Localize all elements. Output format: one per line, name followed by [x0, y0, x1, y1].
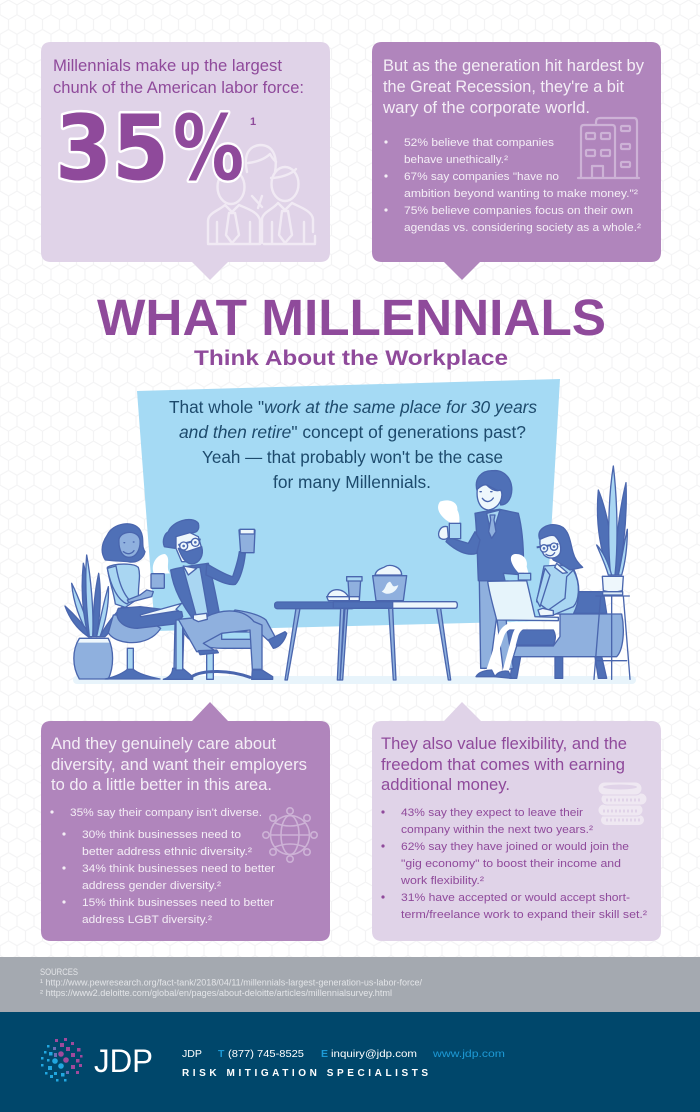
- chair: armchair and plant stand: [500, 592, 623, 678]
- big number: 35%: 35: [55, 96, 169, 201]
- sources text: SOURCES: [40, 967, 78, 977]
- heading: diversity: [51, 734, 307, 794]
- panel: largest chunk of labor force: [41, 42, 330, 280]
- logo: dot cluster: [41, 1038, 82, 1082]
- heading: great recession: But as the generation hit hardest by: [383, 56, 644, 75]
- heading: labor force: Millennials make up the largest: [53, 56, 282, 75]
- bullet list: corporate distrust: behave unethically.²: [404, 154, 508, 166]
- person: bearded man with coffee: [163, 520, 287, 679]
- heading: labor force: [53, 56, 304, 97]
- icon: business people: [208, 145, 315, 244]
- heading: great recession: the Great Recession, they're a bit: [383, 77, 624, 96]
- icon: right plant: [594, 466, 630, 679]
- icon: office building: [578, 118, 639, 178]
- bullet list: corporate distrust: agendas vs. considering society as a whole.²: [404, 222, 641, 234]
- icon: woman's mug with steam: [151, 554, 170, 588]
- icon: globe network: [263, 808, 317, 862]
- tagline: RISK MITIGATION SPECIALISTS: [182, 1068, 432, 1079]
- bullet list: flexibility stats: term/freelance work to expand their skill set.²: [401, 909, 647, 921]
- heading: flexibility: freedom that comes with earning: [381, 755, 625, 774]
- heading: diversity: to do a little better in this area.: [51, 775, 272, 794]
- table: right half with cup and bucket: [333, 565, 457, 680]
- contact line: inquiry@jdp.com: [331, 1048, 417, 1060]
- bullet list: corporate distrust: 67% say companies "have no: [404, 171, 559, 183]
- bullet list: flexibility stats: 62% say they have joined or would join the: [401, 841, 629, 853]
- bullet list: flexibility stats: 31% have accepted or would accept short-: [401, 892, 630, 904]
- sources text: [40, 967, 423, 998]
- floor: [73, 676, 636, 684]
- bullet list: diversity stats: 35% say their company isn't diverse.: [70, 807, 262, 819]
- callout: work at same place: Yeah — that probably won't be the case: [202, 447, 503, 467]
- sources text: ² https://www2.deloitte.com/global/en/pages/about-deloitte/articles/millennialsurvey.html: [40, 988, 392, 998]
- bullet list: flexibility stats: company within the next two years.²: [401, 824, 593, 836]
- bullet list: diversity stats: 30% think businesses need to: [82, 829, 241, 841]
- table: left half: [275, 590, 355, 680]
- callout: work at same place: and then retire" concept of generations past?: [179, 422, 526, 442]
- contact line: www.jdp.com: [432, 1048, 505, 1060]
- contact line: (877) 745-8525: [228, 1048, 304, 1060]
- heading: flexibility: additional money.: [381, 775, 510, 794]
- person: woman with notebook: [102, 524, 193, 679]
- contact line: T: [218, 1048, 225, 1060]
- heading: diversity: And they genuinely care about: [51, 734, 276, 753]
- bullet list: diversity stats: 34% think businesses need to better: [82, 863, 275, 875]
- icon: coin stack: [598, 782, 647, 825]
- heading: great recession: [382, 56, 644, 117]
- bullet list: flexibility stats: "gig economy" to boost their income and: [401, 858, 621, 870]
- heading: diversity: diversity, and want their employers: [51, 755, 307, 774]
- bullet list: flexibility stats: work flexibility.²: [400, 875, 484, 887]
- contact line: E: [321, 1048, 328, 1060]
- contact line: JDP: [182, 1048, 202, 1060]
- person: standing man with mug: [438, 471, 523, 671]
- bullet list: diversity stats: better address ethnic diversity.²: [82, 846, 252, 858]
- illustration: woman with notebook and plant, bearded man with coffee: [65, 520, 355, 680]
- footer band: [0, 1012, 700, 1112]
- subtitle: Think About the Workplace: [194, 347, 508, 370]
- big number: 35%: [55, 96, 244, 201]
- bullet list: diversity stats: address LGBT diversity.²: [82, 914, 212, 926]
- bullet list: corporate distrust: 75% believe companies focus on their own: [404, 205, 633, 217]
- sources text: ¹ http://www.pewresearch.org/fact-tank/2018/04/11/millennials-largest-generation-us-labor-force/: [40, 978, 423, 988]
- panel: diversity: [41, 702, 330, 941]
- bullet list: diversity stats: [50, 807, 275, 926]
- bullet list: corporate distrust: [384, 137, 641, 234]
- callout: work at same place: [169, 397, 537, 492]
- panel: blue backdrop: [137, 379, 560, 631]
- chair: woman's seat: [105, 615, 161, 679]
- footnote marker: 1: [250, 116, 256, 128]
- bullet list: diversity stats: 15% think businesses need to better: [82, 897, 274, 909]
- panel: flexibility: [372, 702, 661, 941]
- logo: JDP wordmark: JDP: [94, 1043, 153, 1079]
- title: WHAT MILLENNIALS: [97, 289, 606, 346]
- bullet list: corporate distrust: ambition beyond wanting to make money."²: [404, 188, 638, 200]
- heading: labor force: chunk of the American labor force:: [53, 78, 304, 97]
- callout: work at same place: for many Millennials.: [273, 472, 431, 492]
- icon: left plant: [65, 555, 125, 679]
- callout: work at same place: That whole "work at the same place for 30 years: [169, 397, 537, 417]
- big number: 35%: %: [173, 96, 244, 201]
- illustration: table items, standing man and seated woman, plant: [333, 466, 630, 680]
- panel: wary of the corporate world: [372, 42, 661, 280]
- bullet list: flexibility stats: 43% say they expect to leave their: [401, 807, 583, 819]
- sources band: [0, 957, 700, 1012]
- heading: flexibility: They also value flexibility, and the: [381, 734, 627, 753]
- bullet list: corporate distrust: 52% believe that companies: [404, 137, 554, 149]
- person: seated woman with laptop: [476, 525, 583, 678]
- chair: man's seat: [176, 620, 253, 679]
- bullet list: flexibility stats: [381, 807, 647, 921]
- bullet list: diversity stats: address gender diversity.²: [82, 880, 221, 892]
- contact line: [182, 1048, 505, 1060]
- heading: flexibility: [381, 734, 627, 794]
- heading: great recession: wary of the corporate world.: [382, 98, 590, 117]
